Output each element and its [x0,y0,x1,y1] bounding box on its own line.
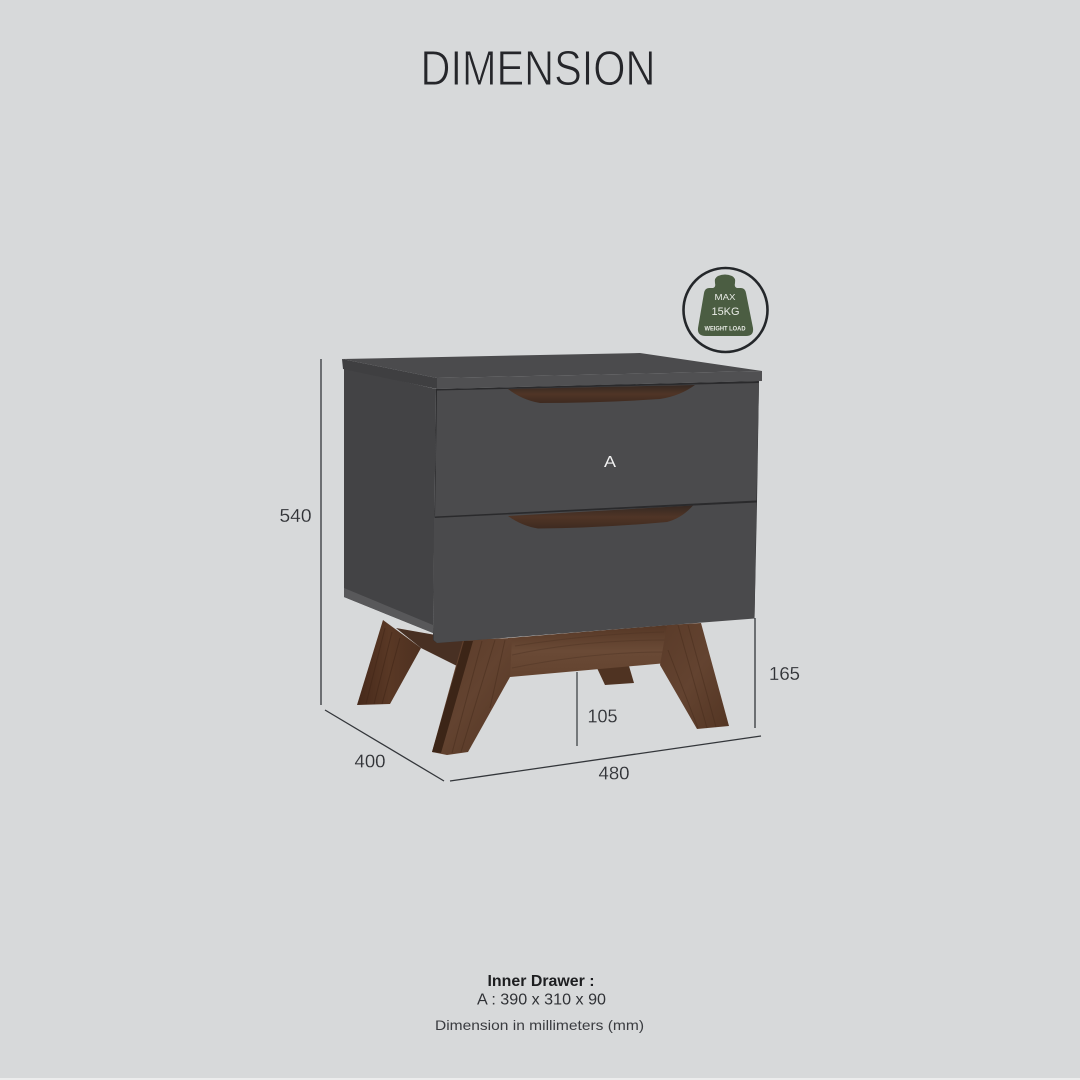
front apron [508,625,669,677]
upper drawer [435,383,759,516]
dimension line: depth 400 [325,710,444,781]
side bottom edge [344,588,433,633]
dimension line: width 480: 480 [598,764,630,784]
title: DIMENSION [420,42,656,96]
back left leg [357,620,421,705]
icon: max weight load badge: WEIGHT LOAD [704,326,746,332]
dimension line: height 540: 540 [280,506,312,526]
label A: A [604,454,616,471]
cabinet top [342,353,762,389]
front left leg [432,638,512,755]
icon: max weight load badge [684,268,768,352]
drawer backing [433,381,759,643]
dimension line: leg clearance 105: 105 [588,706,618,726]
upper drawer handle [508,385,695,403]
dimension line: drawer bottom height 165: 165 [769,664,800,684]
lower drawer handle [508,506,693,528]
side apron [396,628,464,666]
lower drawer [434,502,756,643]
cabinet side panel [344,368,436,633]
icon: max weight load badge: 15KG [712,306,740,318]
inner drawer notes: Inner Drawer : [488,973,594,990]
icon: max weight load badge: MAX [714,292,736,302]
dimension line: leg clearance 105 [577,672,618,746]
inner drawer notes: Dimension in millimeters (mm) [435,1017,644,1033]
nightstand illustration [342,353,762,755]
front right leg [660,623,729,729]
dimension line: depth 400: 400 [354,752,386,772]
inner drawer notes [435,973,644,1033]
inner drawer notes: A : 390 x 310 x 90 [477,992,606,1008]
dimension line: drawer bottom height 165 [755,618,800,728]
dimension line: width 480 [450,736,761,784]
back right leg [597,666,634,685]
